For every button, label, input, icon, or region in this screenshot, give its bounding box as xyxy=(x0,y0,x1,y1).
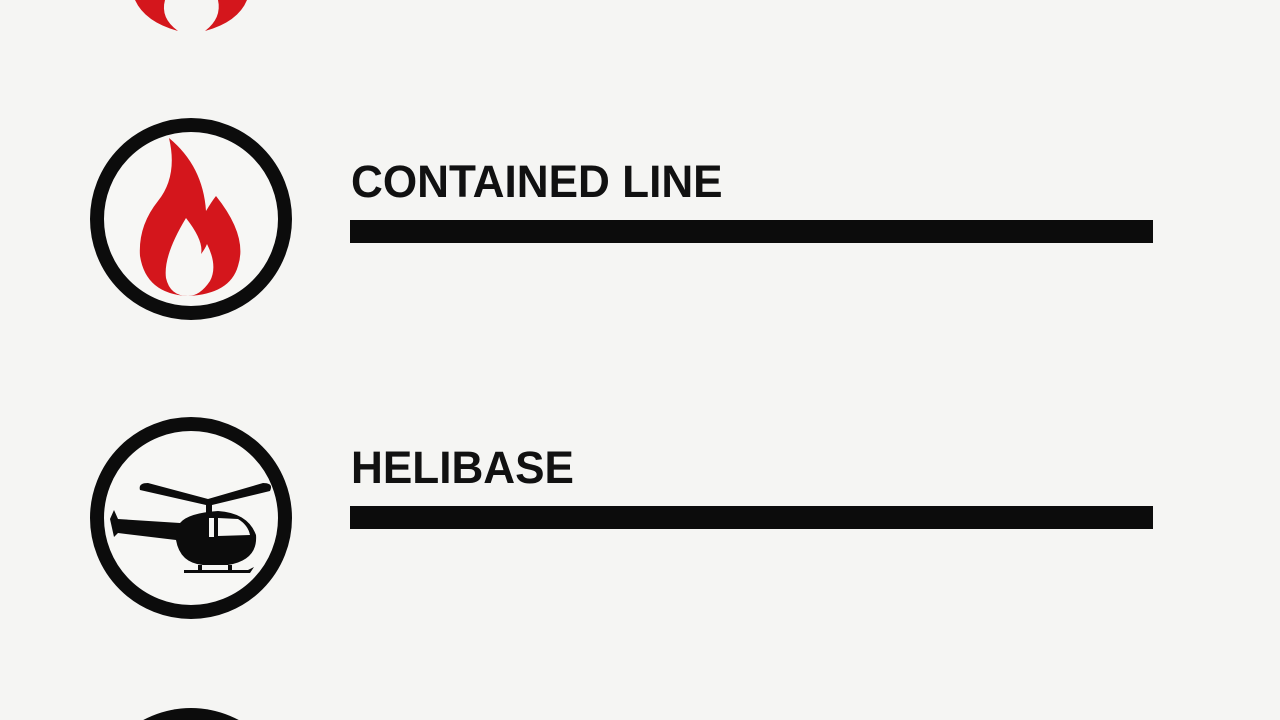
bar: helibase xyxy=(350,506,1153,529)
icon: partial circle at bottom xyxy=(143,708,239,720)
icon: helicopter in circle xyxy=(90,417,292,619)
icon: flame in circle xyxy=(90,118,292,320)
bar: contained line xyxy=(350,220,1153,243)
heading: helibase: HELIBASE xyxy=(351,442,574,493)
icon: partial flame at top xyxy=(135,0,247,31)
heading: contained line: CONTAINED LINE xyxy=(351,156,723,207)
